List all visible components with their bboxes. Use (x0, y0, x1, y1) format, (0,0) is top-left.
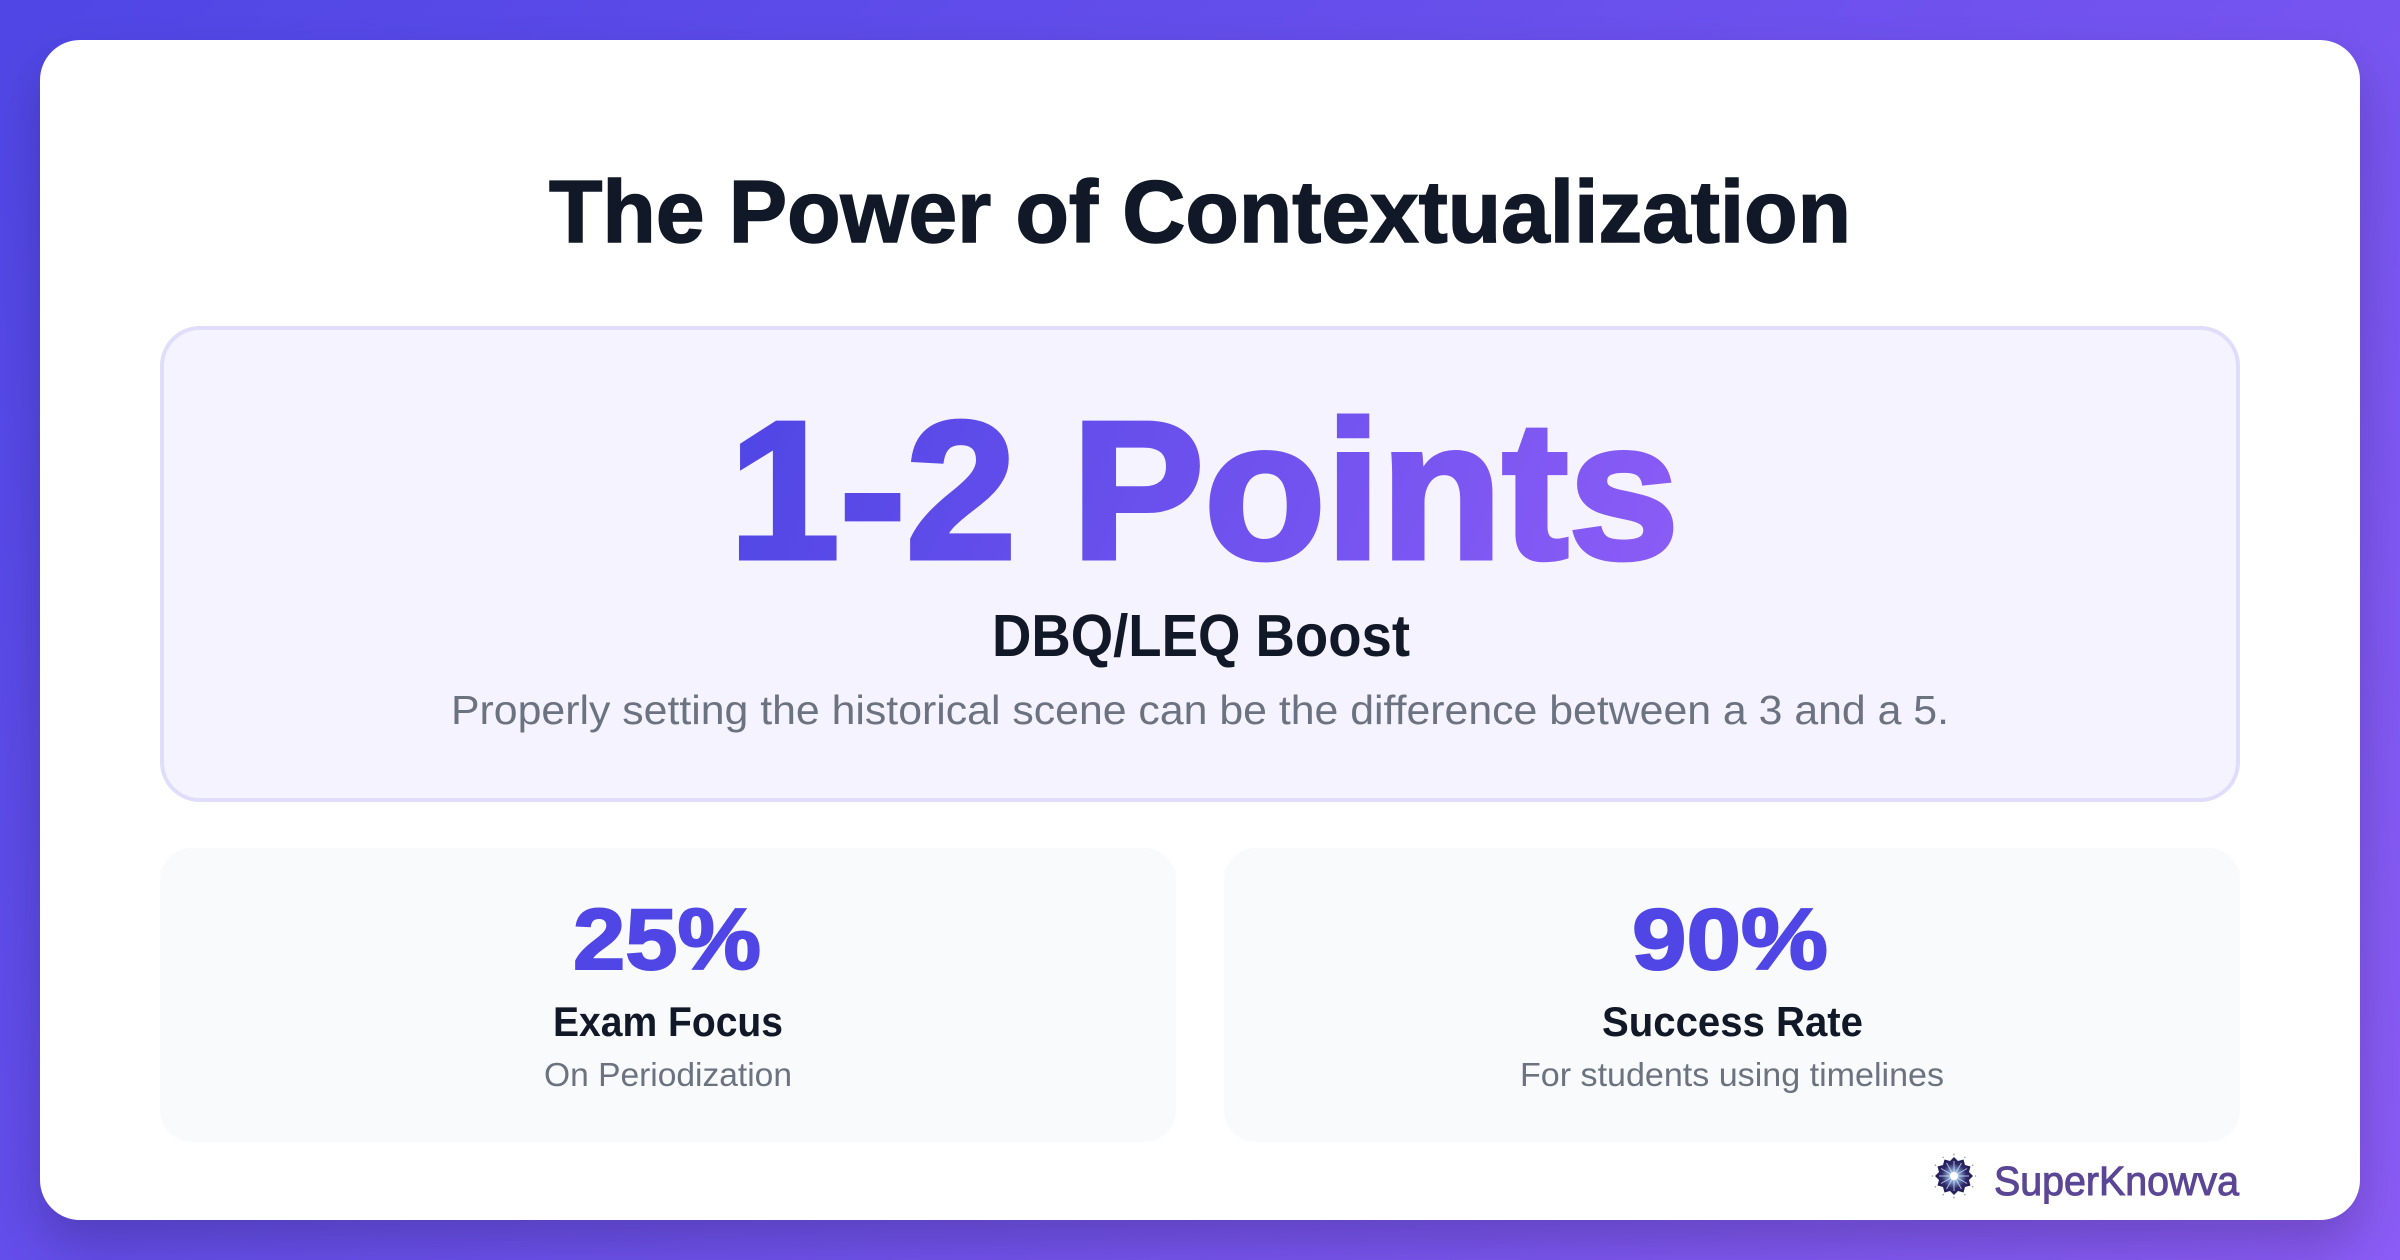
hero heading: DBQ/LEQ Boost (992, 603, 1410, 669)
panel: exam focus (160, 848, 1176, 1142)
logo: SuperKnowva (1932, 1154, 2239, 1204)
exam focus label: Exam Focus (553, 998, 783, 1045)
icon: starburst (1932, 1154, 1976, 1198)
success rate label: Success Rate (1602, 998, 1863, 1045)
exam focus value: 25% (573, 892, 761, 988)
hero number: 1-2 Points (729, 381, 1679, 600)
panel: hero stat (162, 328, 2238, 800)
logo wordmark: SuperKnowva (1994, 1158, 2239, 1204)
success rate note: For students using timelines (1520, 1056, 1944, 1093)
exam focus note: On Periodization (544, 1056, 792, 1093)
panel: success rate (1224, 848, 2240, 1142)
title: The Power of Contextualization (549, 162, 1851, 261)
success rate value: 90% (1632, 892, 1828, 988)
hero description: Properly setting the historical scene can be the difference between a 3 and a 5. (451, 687, 1949, 733)
